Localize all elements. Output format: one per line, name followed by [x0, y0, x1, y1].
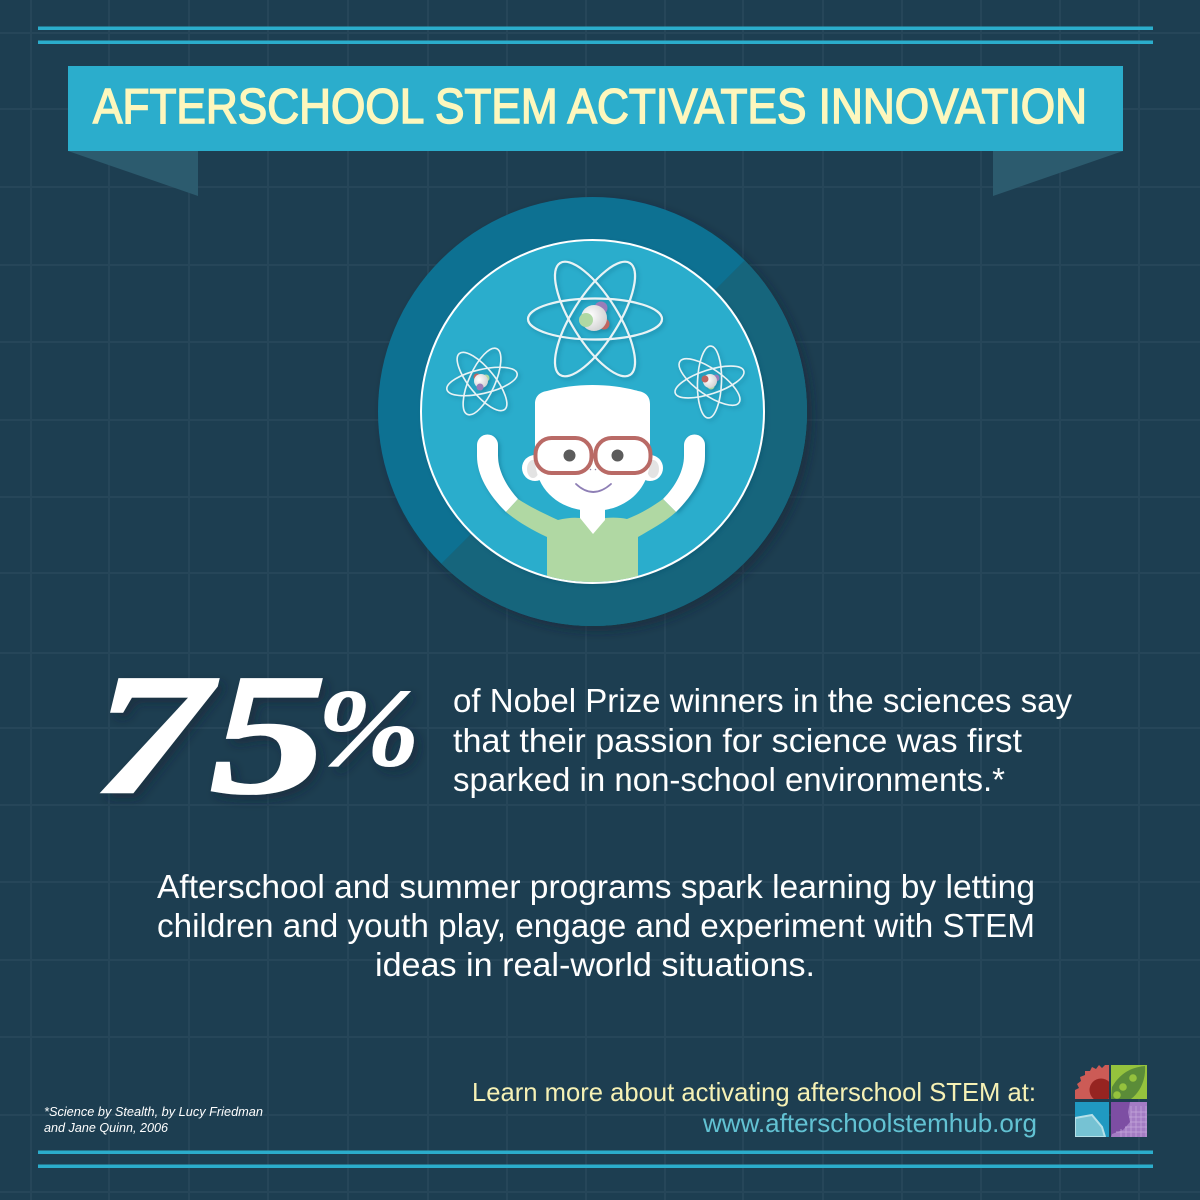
- large atom: [528, 251, 662, 387]
- learn more call to action: Learn more about activating afterschool STEM at:: [472, 1077, 1036, 1107]
- program description: [157, 868, 1035, 983]
- program description: children and youth play, engage and experiment with STEM: [157, 907, 1035, 944]
- program description: Afterschool and summer programs spark learning by letting: [157, 868, 1035, 905]
- right ribbon fold: [993, 151, 1123, 196]
- logo red gear quadrant: [1075, 1065, 1109, 1099]
- raised arms: [477, 435, 705, 512]
- glasses: [536, 438, 650, 473]
- title banner: [68, 66, 1123, 196]
- scientist illustration badge: [378, 197, 807, 626]
- smile: [576, 484, 611, 492]
- 75 numerals: 75: [93, 640, 327, 830]
- bottom double rule: [38, 1150, 1153, 1168]
- title: AFTERSCHOOL STEM ACTIVATES INNOVATION: [93, 80, 1087, 134]
- badge inner disc: [421, 240, 764, 583]
- nose dots: [590, 469, 596, 470]
- footnote citation: *Science by Stealth, by Lucy Friedman: [44, 1105, 263, 1119]
- left atom: [444, 343, 520, 420]
- footnote citation: [44, 1105, 263, 1135]
- percent sign: %: [317, 668, 420, 789]
- right atom: [672, 346, 747, 418]
- green shirt: [506, 499, 676, 590]
- program description: ideas in real-world situations.: [375, 946, 815, 983]
- eyes: [564, 450, 624, 462]
- statistic description: [453, 682, 1072, 798]
- banner bar: [68, 66, 1123, 151]
- statistic description: of Nobel Prize winners in the sciences say: [453, 682, 1072, 719]
- statistic description: that their passion for science was first: [453, 722, 1022, 759]
- STEM hub logo: [1075, 1065, 1147, 1137]
- footnote citation: and Jane Quinn, 2006: [44, 1121, 168, 1135]
- statistic description: sparked in non-school environments.*: [453, 761, 1005, 798]
- 75 percent statistic: [93, 640, 420, 830]
- learn more call to action: www.afterschoolstemhub.org: [702, 1108, 1037, 1138]
- neck and collar: [580, 510, 605, 534]
- logo green rocket quadrant: [1111, 1065, 1147, 1099]
- logo blue hexagon quadrant: [1075, 1102, 1109, 1137]
- head and hair: [535, 385, 650, 511]
- logo purple grid quadrant: [1111, 1102, 1147, 1137]
- top double rule: [38, 26, 1153, 44]
- learn more call to action: [472, 1077, 1037, 1138]
- scientist character: [477, 385, 705, 590]
- badge outer ring: [378, 197, 807, 626]
- left ribbon fold: [68, 151, 198, 196]
- ears: [522, 455, 663, 481]
